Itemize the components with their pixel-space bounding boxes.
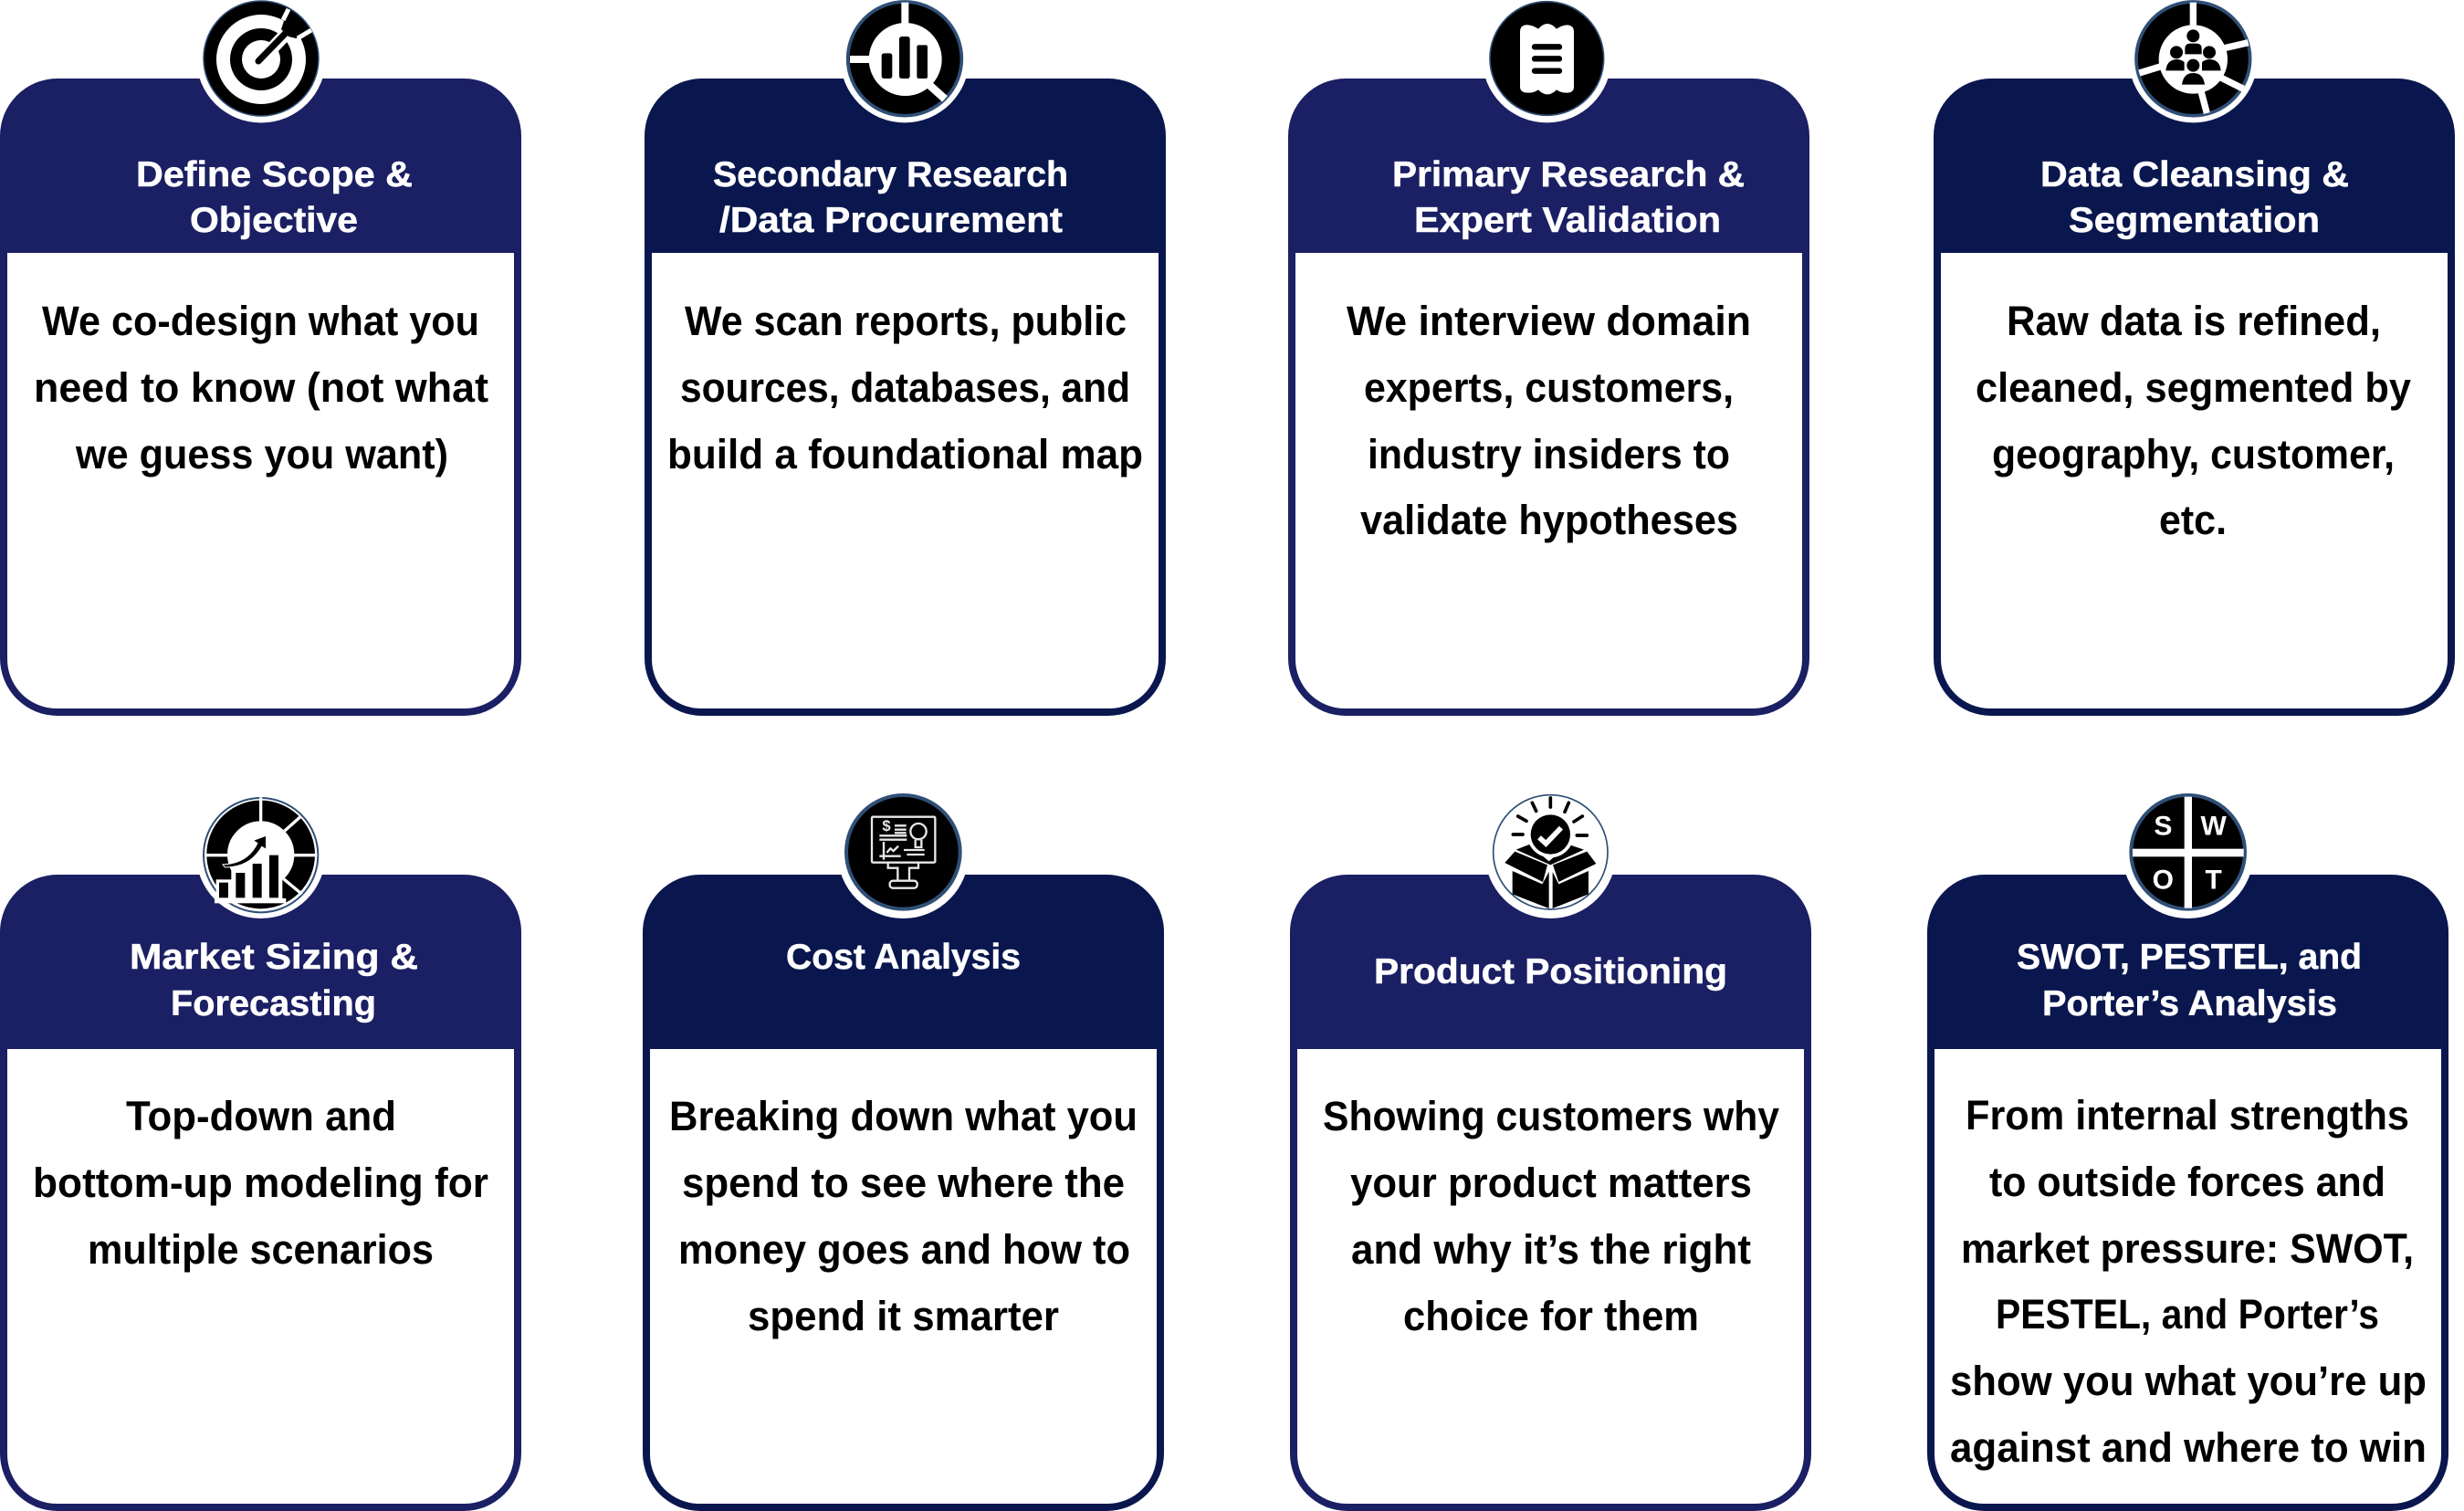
text block: scope description: We co-design what you bbox=[42, 298, 479, 344]
heading: Data Cleansing & Segmentation: Segmentation bbox=[2069, 201, 2320, 240]
icon: receipt bbox=[1483, 0, 1611, 122]
heading: Market Sizing & Forecasting bbox=[130, 938, 418, 1023]
text block: cost analysis description bbox=[669, 1093, 1138, 1339]
text block: product positioning description: Showing customers why bbox=[1323, 1093, 1779, 1139]
text block: SWOT description: From internal strengths bbox=[1966, 1092, 2409, 1138]
text block: primary research description: industry insiders to bbox=[1368, 431, 1730, 477]
icon: monitor with cost chart: $ bbox=[882, 817, 891, 834]
icon: target with dart bbox=[196, 0, 326, 122]
panel: Define Scope & Objective bbox=[0, 0, 521, 716]
icon: SWOT quadrant: W bbox=[2201, 812, 2228, 842]
text block: cost analysis description: Breaking down what you bbox=[669, 1093, 1138, 1139]
text block: cost analysis description: spend to see where the bbox=[682, 1159, 1125, 1206]
heading: Data Cleansing & Segmentation bbox=[2040, 155, 2349, 240]
icon: magnifier with bars bbox=[840, 0, 970, 122]
text block: secondary research description: We scan reports, public bbox=[685, 298, 1127, 344]
text block: primary research description: We interview domain bbox=[1347, 298, 1751, 344]
text block: scope description: need to know (not what bbox=[34, 364, 488, 411]
panel: SWOT, PESTEL, and Porter's Analysis bbox=[1927, 787, 2448, 1511]
text block: scope description bbox=[34, 298, 488, 477]
text block: secondary research description bbox=[667, 298, 1143, 477]
heading: SWOT, PESTEL, and Porter's Analysis: Porter’s Analysis bbox=[2042, 984, 2337, 1023]
heading: Secondary Research /Data Procurement bbox=[713, 155, 1068, 240]
text block: scope description: we guess you want) bbox=[75, 431, 448, 477]
heading: Secondary Research /Data Procurement: Secondary Research bbox=[713, 155, 1068, 194]
text block: market sizing description: bottom-up modeling for bbox=[33, 1159, 488, 1206]
text block: SWOT description bbox=[1950, 1092, 2427, 1471]
text block: cost analysis description: spend it smarter bbox=[748, 1293, 1059, 1339]
text block: product positioning description bbox=[1323, 1093, 1779, 1339]
panel: Primary Research & Expert Validation bbox=[1288, 0, 1809, 716]
icon: box with check mark bbox=[1484, 787, 1616, 918]
text block: data cleansing description: Raw data is refined, bbox=[2007, 298, 2381, 344]
heading: Define Scope & Objective: Define Scope & bbox=[136, 155, 413, 194]
panel: Cost Analysis bbox=[643, 787, 1164, 1511]
text block: cost analysis description: money goes and how to bbox=[678, 1226, 1130, 1273]
panel: Market Sizing & Forecasting bbox=[0, 789, 521, 1511]
text block: product positioning description: choice for them bbox=[1403, 1293, 1699, 1339]
icon: monitor with cost chart bbox=[837, 787, 969, 918]
text block: product positioning description: your product matters bbox=[1350, 1159, 1752, 1206]
text block: primary research description: experts, customers, bbox=[1364, 364, 1734, 411]
heading: Cost Analysis: Cost Analysis bbox=[786, 938, 1021, 977]
text block: market sizing description: multiple scenarios bbox=[88, 1226, 434, 1273]
text block: market sizing description: Top-down and bbox=[126, 1093, 396, 1139]
heading: Market Sizing & Forecasting: Forecasting bbox=[171, 984, 376, 1023]
text block: primary research description bbox=[1347, 298, 1751, 543]
heading: Market Sizing & Forecasting: Market Sizing & bbox=[130, 938, 418, 977]
icon: growth chart in ring bbox=[196, 789, 326, 918]
heading: Primary Research & Expert Validation: Expert Validation bbox=[1414, 201, 1721, 240]
heading: SWOT, PESTEL, and Porter's Analysis bbox=[2017, 938, 2362, 1023]
heading: Product Positioning: Product Positioning bbox=[1374, 952, 1727, 992]
text block: primary research description: validate hypotheses bbox=[1360, 497, 1738, 543]
heading: Primary Research & Expert Validation: Primary Research & bbox=[1392, 155, 1745, 194]
text block: data cleansing description bbox=[1976, 298, 2411, 543]
heading: Primary Research & Expert Validation bbox=[1392, 155, 1745, 240]
text block: market sizing description bbox=[33, 1093, 488, 1273]
heading: Define Scope & Objective: Objective bbox=[190, 201, 358, 240]
icon: SWOT quadrant: T bbox=[2206, 865, 2222, 895]
text block: secondary research description: build a foundational map bbox=[667, 431, 1143, 477]
icon: people in segmented ring bbox=[2129, 0, 2258, 122]
text block: secondary research description: sources, databases, and bbox=[680, 364, 1130, 411]
panel: Data Cleansing & Segmentation bbox=[1934, 0, 2455, 716]
panel: Product Positioning bbox=[1290, 787, 1811, 1511]
panel: Secondary Research / Data Procurement bbox=[645, 0, 1166, 716]
heading: Secondary Research /Data Procurement: /Data Procurement bbox=[719, 201, 1063, 240]
icon: SWOT quadrant: O bbox=[2153, 865, 2174, 895]
text block: product positioning description: and why it’s the right bbox=[1351, 1226, 1751, 1273]
text block: data cleansing description: cleaned, segmented by bbox=[1976, 364, 2411, 411]
text block: data cleansing description: geography, customer, bbox=[1992, 431, 2395, 477]
text block: SWOT description: market pressure: SWOT, bbox=[1961, 1225, 2414, 1272]
text block: SWOT description: to outside forces and bbox=[1989, 1159, 2385, 1205]
heading: SWOT, PESTEL, and Porter's Analysis: SWOT, PESTEL, and bbox=[2017, 938, 2362, 977]
text block: SWOT description: against and where to win bbox=[1950, 1424, 2427, 1471]
text block: SWOT description: show you what you’re up bbox=[1950, 1358, 2427, 1404]
icon: SWOT quadrant bbox=[2123, 787, 2254, 918]
heading: Data Cleansing & Segmentation: Data Cleansing & bbox=[2040, 155, 2349, 194]
text block: data cleansing description: etc. bbox=[2159, 497, 2227, 543]
text block: SWOT description: PESTEL, and Porter’s bbox=[1996, 1291, 2379, 1338]
icon: SWOT quadrant: S bbox=[2154, 812, 2172, 842]
heading: Define Scope & Objective bbox=[136, 155, 413, 240]
